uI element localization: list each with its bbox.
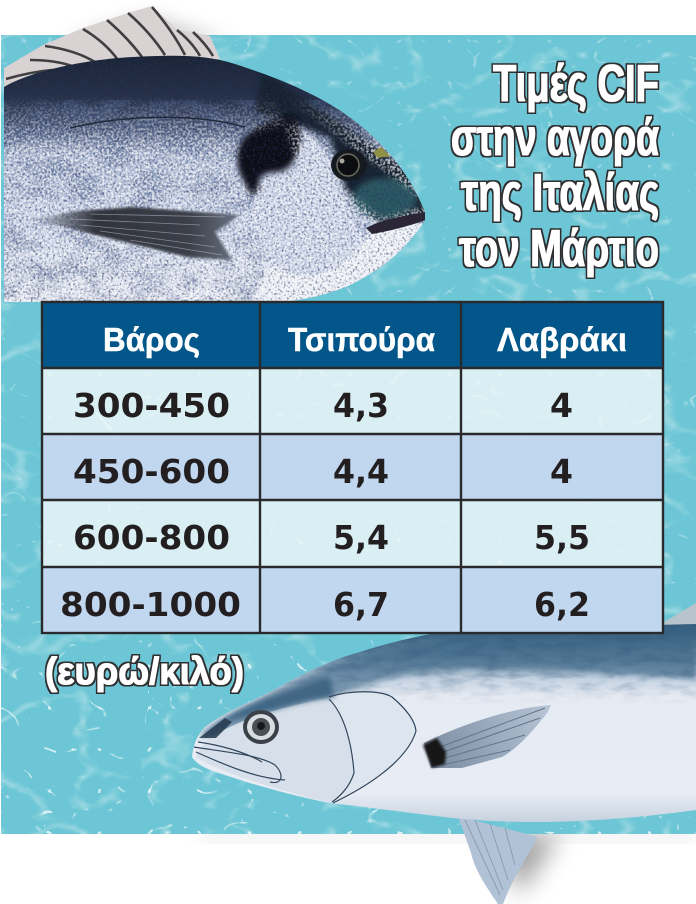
eye [331,149,367,181]
row 450-600: 4,4 [333,452,389,491]
row 300-450: 4 [550,386,573,425]
row 300-450: 300-450 [73,386,230,425]
row 800-1000: 6,7 [333,585,389,624]
pectoral fin [423,705,551,768]
dorsal fin [4,6,220,90]
header row [42,302,663,368]
illustration: gilthead sea bream [0,6,440,305]
row 450-600: 4 [550,452,573,491]
header labels [103,321,627,358]
grid lines [42,302,663,633]
row 800-1000: 800-1000 [60,585,241,624]
row 800-1000: 6,2 [534,585,590,624]
nostril area [199,718,232,738]
back top patch on head [200,676,335,738]
header labels: Λαβράκι [497,321,627,358]
ventral fin [458,816,538,904]
illustration: sea bass [190,603,696,904]
header labels: Τσιπούρα [288,321,435,358]
dark back band [200,625,696,737]
mouth [366,212,425,234]
row 600-800: 5,5 [534,518,590,557]
row 600-800: 5,4 [333,518,389,557]
pale belly [250,222,424,303]
lateral line [70,117,245,128]
row 300-450: 4,3 [333,386,389,425]
silver cheek [252,126,357,285]
eye [243,710,279,744]
title [451,55,659,278]
price table [42,302,663,633]
greenish head tone [353,178,417,218]
table rows background [42,368,663,633]
dorsal fin tip [664,603,696,634]
gold forehead band [373,147,390,158]
unit note: (ευρώ/κιλό) [45,651,244,693]
gill lines [194,692,416,803]
header labels: Βάρος [103,321,200,358]
pectoral fin [33,207,240,260]
row 600-800: 600-800 [73,518,230,557]
row 600-800 [73,518,590,557]
row 300-450 [73,386,573,425]
row 450-600: 450-600 [73,452,230,491]
dark gill patch [237,116,302,196]
dark head top [255,70,440,222]
row 450-600 [73,452,573,491]
row 800-1000 [60,585,590,624]
head [196,698,353,803]
